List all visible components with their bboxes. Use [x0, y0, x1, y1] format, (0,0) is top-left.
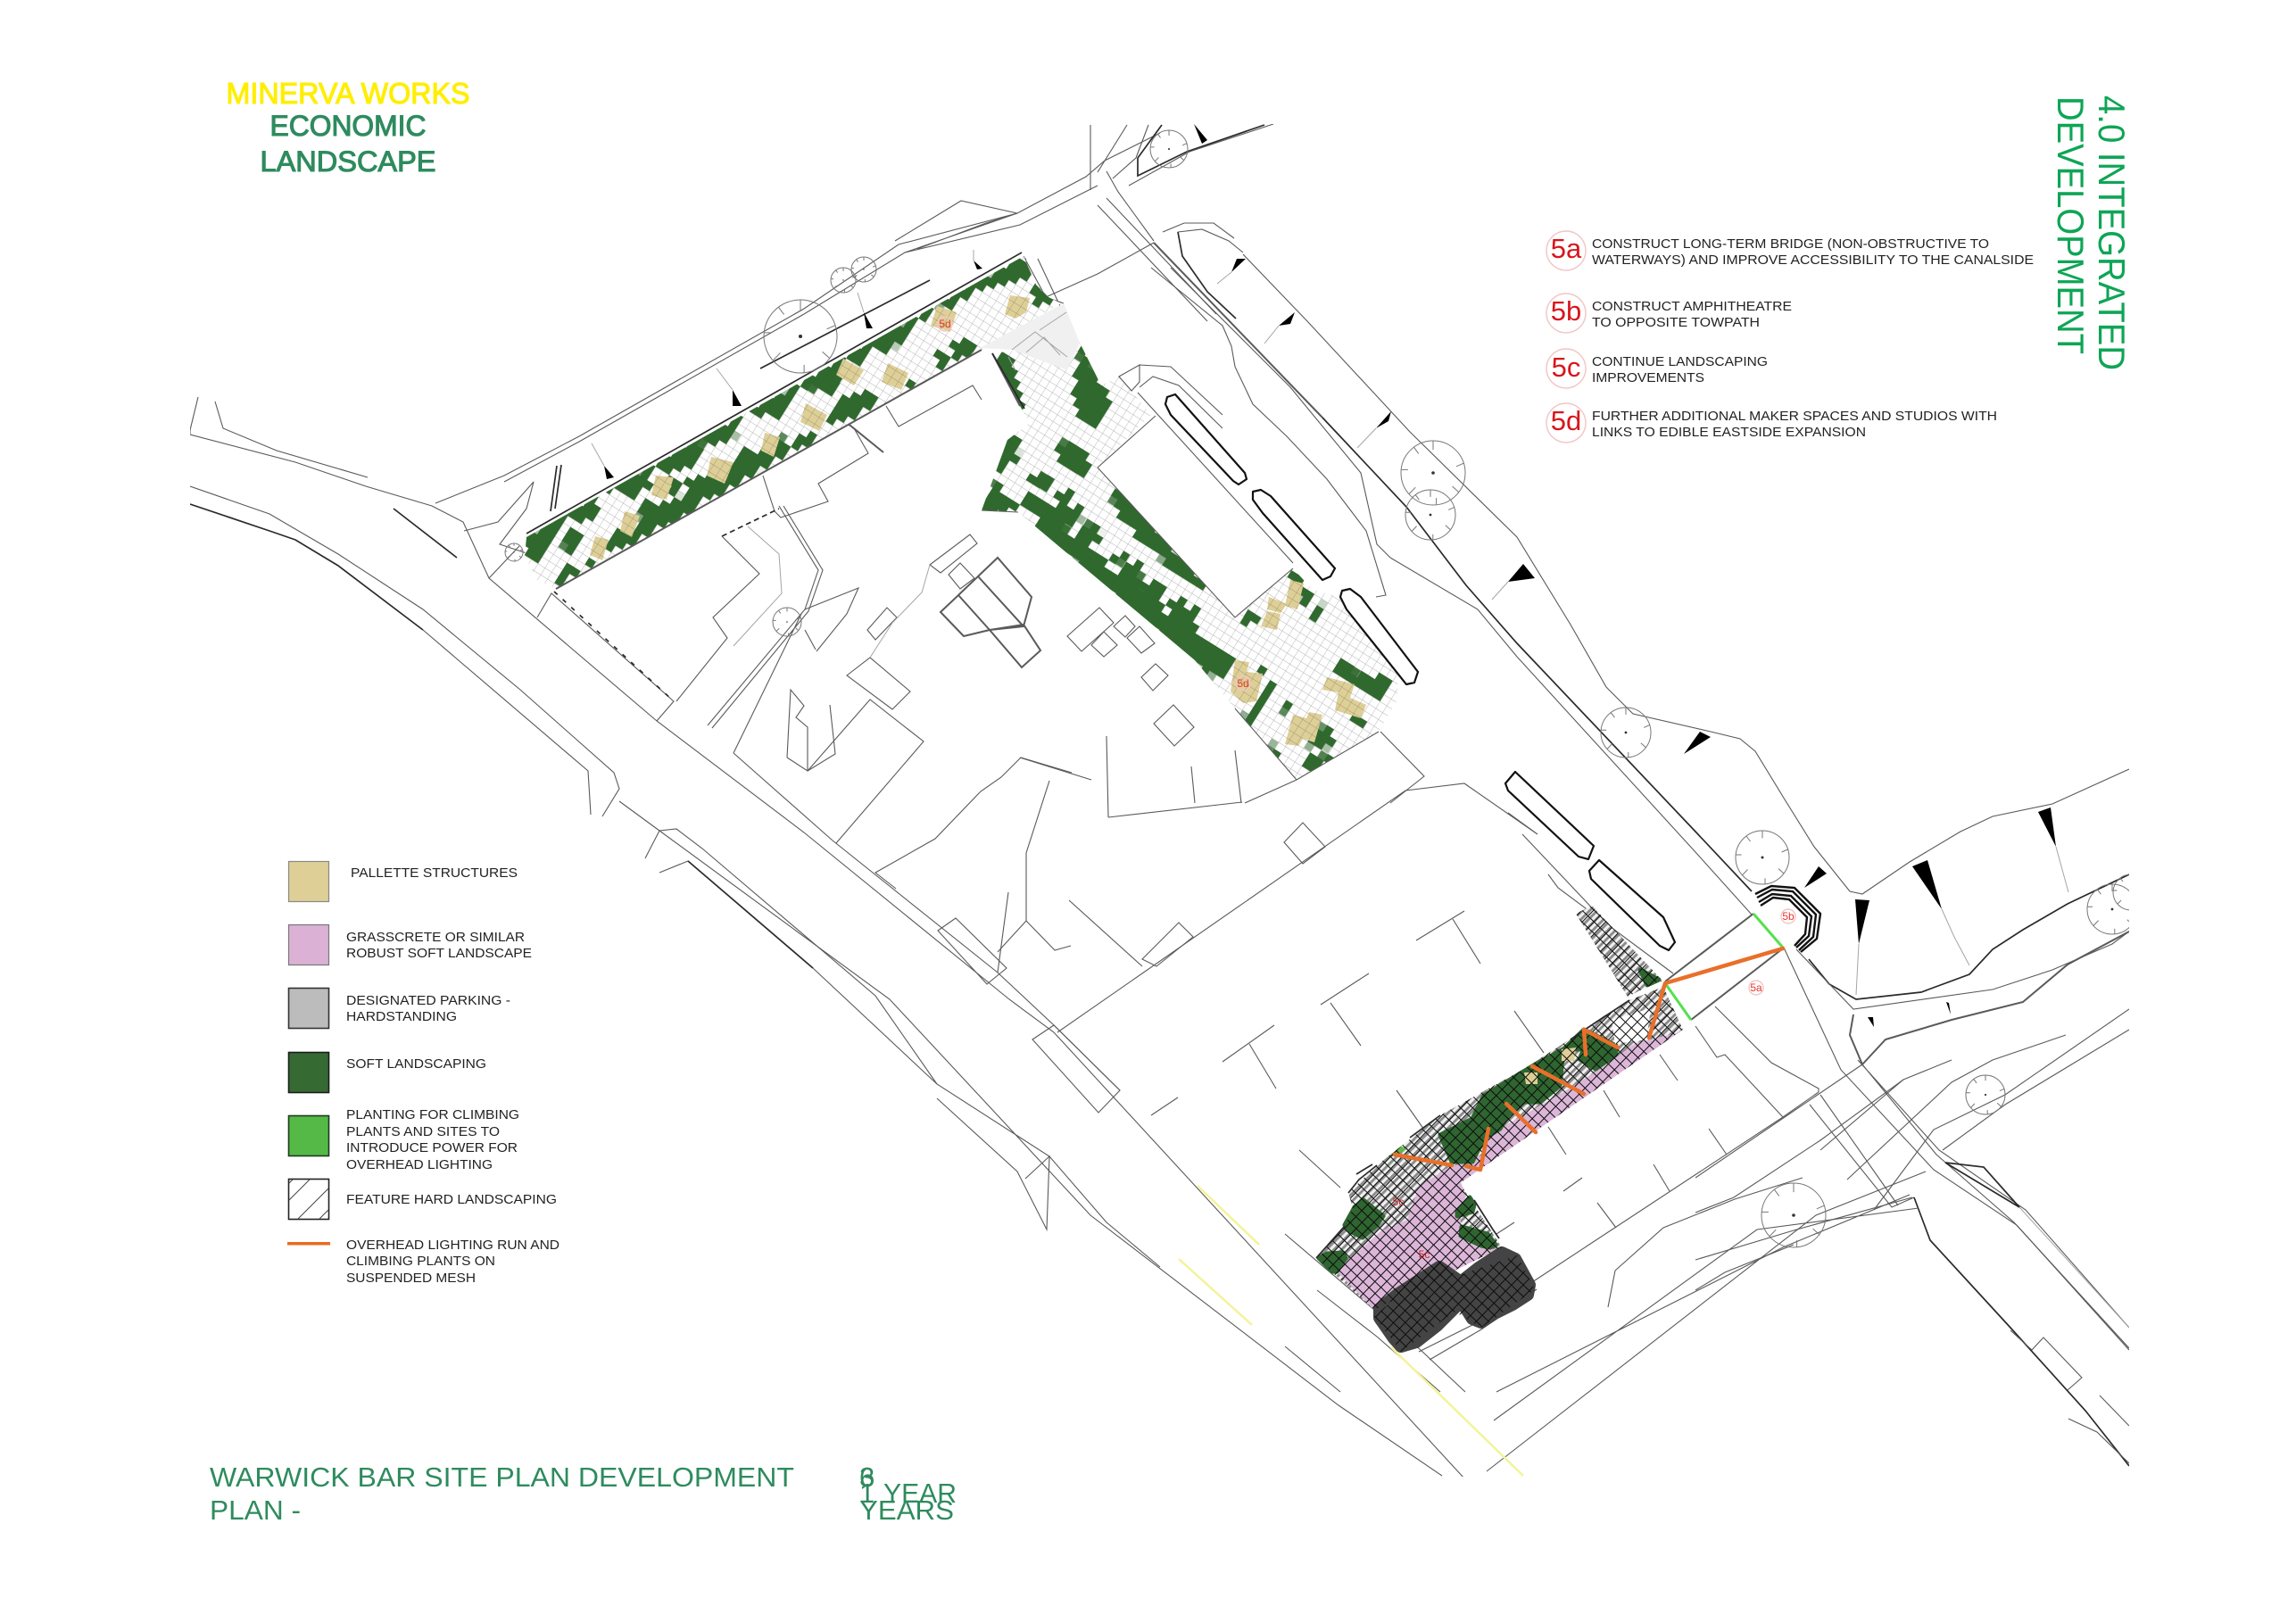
legend: pallette structures: [289, 862, 518, 901]
action 5d: LINKS TO EDIBLE EASTSIDE EXPANSION: [1592, 425, 1866, 440]
title: [227, 77, 469, 178]
action 5b: [1546, 294, 1792, 333]
paved area edges: [556, 350, 1379, 780]
action 5b: TO OPPOSITE TOWPATH: [1592, 315, 1760, 330]
legend: grasscrete: ROBUST SOFT LANDSCAPE: [346, 946, 532, 961]
dark planted blocks: [1380, 1253, 1529, 1346]
legend: climbing plants: PLANTING FOR CLIMBING: [346, 1107, 519, 1122]
action 5b: CONSTRUCT AMPHITHEATRE: [1592, 299, 1792, 314]
tag 5c lower: 5c: [1419, 1248, 1430, 1261]
overlapping phase duration labels: [859, 1462, 957, 1526]
legend: feature hard landscaping: [289, 1180, 557, 1219]
tag 5d lower: 5d: [1237, 677, 1249, 690]
legend: climbing plants: PLANTS AND SITES TO: [346, 1124, 500, 1139]
action 5d: [1546, 403, 1997, 443]
infographic canvas: [190, 82, 2129, 1520]
soft landscaping within hard zone: [1319, 970, 1659, 1271]
legend: [287, 862, 559, 1286]
amphitheatre: [1755, 886, 1820, 952]
legend: climbing plants: [289, 1107, 519, 1172]
highlighted cells within hard zone: [1386, 1008, 1651, 1160]
action 5a: WATERWAYS) AND IMPROVE ACCESSIBILITY TO THE CANALSIDE: [1592, 253, 2034, 268]
legend: climbing plants: OVERHEAD LIGHTING: [346, 1157, 493, 1172]
road and boundary linework: west: [190, 397, 1464, 1478]
section heading: [2050, 95, 2132, 370]
legend: grasscrete: GRASSCRETE OR SIMILAR: [346, 930, 525, 945]
action 5c: IMPROVEMENTS: [1592, 370, 1704, 385]
section heading: 4.0 INTEGRATED: [2091, 95, 2132, 370]
overlapping phase duration labels: 3: [859, 1462, 874, 1493]
overlapping phase duration labels: 6: [859, 1462, 874, 1493]
legend: overhead lighting run: [287, 1238, 559, 1286]
canal banks: [1285, 418, 2129, 1471]
action 5c: 5c: [1552, 352, 1580, 383]
overlapping phase duration labels: YEAR: [883, 1478, 957, 1509]
soft landscaping cells: [525, 259, 1393, 771]
moored boats: [1165, 394, 1675, 950]
legend: overhead lighting run: CLIMBING PLANTS ON: [346, 1254, 495, 1269]
upper paved grid: base: [525, 256, 1060, 553]
section direction arrows: [592, 124, 2068, 1027]
action 5a: [1546, 231, 2034, 270]
plan caption: [210, 1462, 794, 1526]
grasscrete areas: [1337, 1030, 1683, 1310]
tag 5d upper: 5d: [939, 318, 951, 330]
site plan: [190, 0, 2149, 1478]
action 5c: [1546, 349, 1768, 388]
plan caption: WARWICK BAR SITE PLAN DEVELOPMENT: [210, 1462, 794, 1493]
pallette structures: [590, 295, 1366, 746]
yellow road markings: [1179, 1186, 1523, 1476]
legend: overhead lighting run: SUSPENDED MESH: [346, 1271, 476, 1286]
overlapping phase duration labels: YEARS: [859, 1495, 954, 1526]
tag 5a: 5a: [1750, 981, 1762, 994]
road and boundary linework: north: [435, 124, 2129, 894]
tag 5c upper: 5c: [1393, 1196, 1404, 1208]
legend: designated parking: [289, 989, 510, 1028]
legend: climbing plants: INTRODUCE POWER FOR: [346, 1140, 518, 1155]
title: LANDSCAPE: [261, 145, 435, 178]
action 5b: 5b: [1551, 295, 1581, 327]
action 5a: CONSTRUCT LONG-TERM BRIDGE (NON-OBSTRUCTIVE TO: [1592, 236, 1989, 252]
legend: pallette structures: PALLETTE STRUCTURES: [351, 865, 518, 881]
bridge: [1665, 914, 1783, 1020]
feature hard landscaping zone: [1316, 906, 1683, 1352]
title: MINERVA WORKS: [227, 77, 469, 110]
legend: soft landscaping: SOFT LANDSCAPING: [346, 1056, 486, 1072]
action 5a: 5a: [1551, 233, 1582, 264]
plan caption: PLAN -: [210, 1495, 301, 1526]
tag 5b: 5b: [1782, 910, 1795, 923]
plan tags: [938, 317, 1795, 1261]
action 5d: 5d: [1551, 405, 1581, 436]
entrance steps: [980, 303, 1223, 428]
legend: designated parking: DESIGNATED PARKING -: [346, 993, 510, 1008]
legend: grasscrete: [289, 924, 532, 965]
paving grid: [525, 257, 1397, 778]
phase actions list: [1546, 231, 2034, 443]
trees: [505, 130, 2149, 1247]
action 5c: CONTINUE LANDSCAPING: [1592, 354, 1768, 369]
legend: overhead lighting run: OVERHEAD LIGHTING RUN AND: [346, 1238, 559, 1253]
legend: designated parking: HARDSTANDING: [346, 1009, 457, 1024]
central building footprints: [676, 385, 1538, 1230]
overhead lighting runs: [1395, 948, 1783, 1170]
overlapping phase duration labels: 1: [859, 1478, 874, 1509]
suspended mesh: [1317, 906, 1683, 1352]
legend: soft landscaping: [289, 1053, 486, 1092]
title: ECONOMIC: [269, 110, 427, 142]
section heading: DEVELOPMENT: [2050, 96, 2091, 354]
action 5d: FURTHER ADDITIONAL MAKER SPACES AND STUDIOS WITH: [1592, 409, 1997, 424]
parking bay markings: [1151, 911, 1727, 1234]
legend: feature hard landscaping: FEATURE HARD LANDSCAPING: [346, 1192, 557, 1207]
